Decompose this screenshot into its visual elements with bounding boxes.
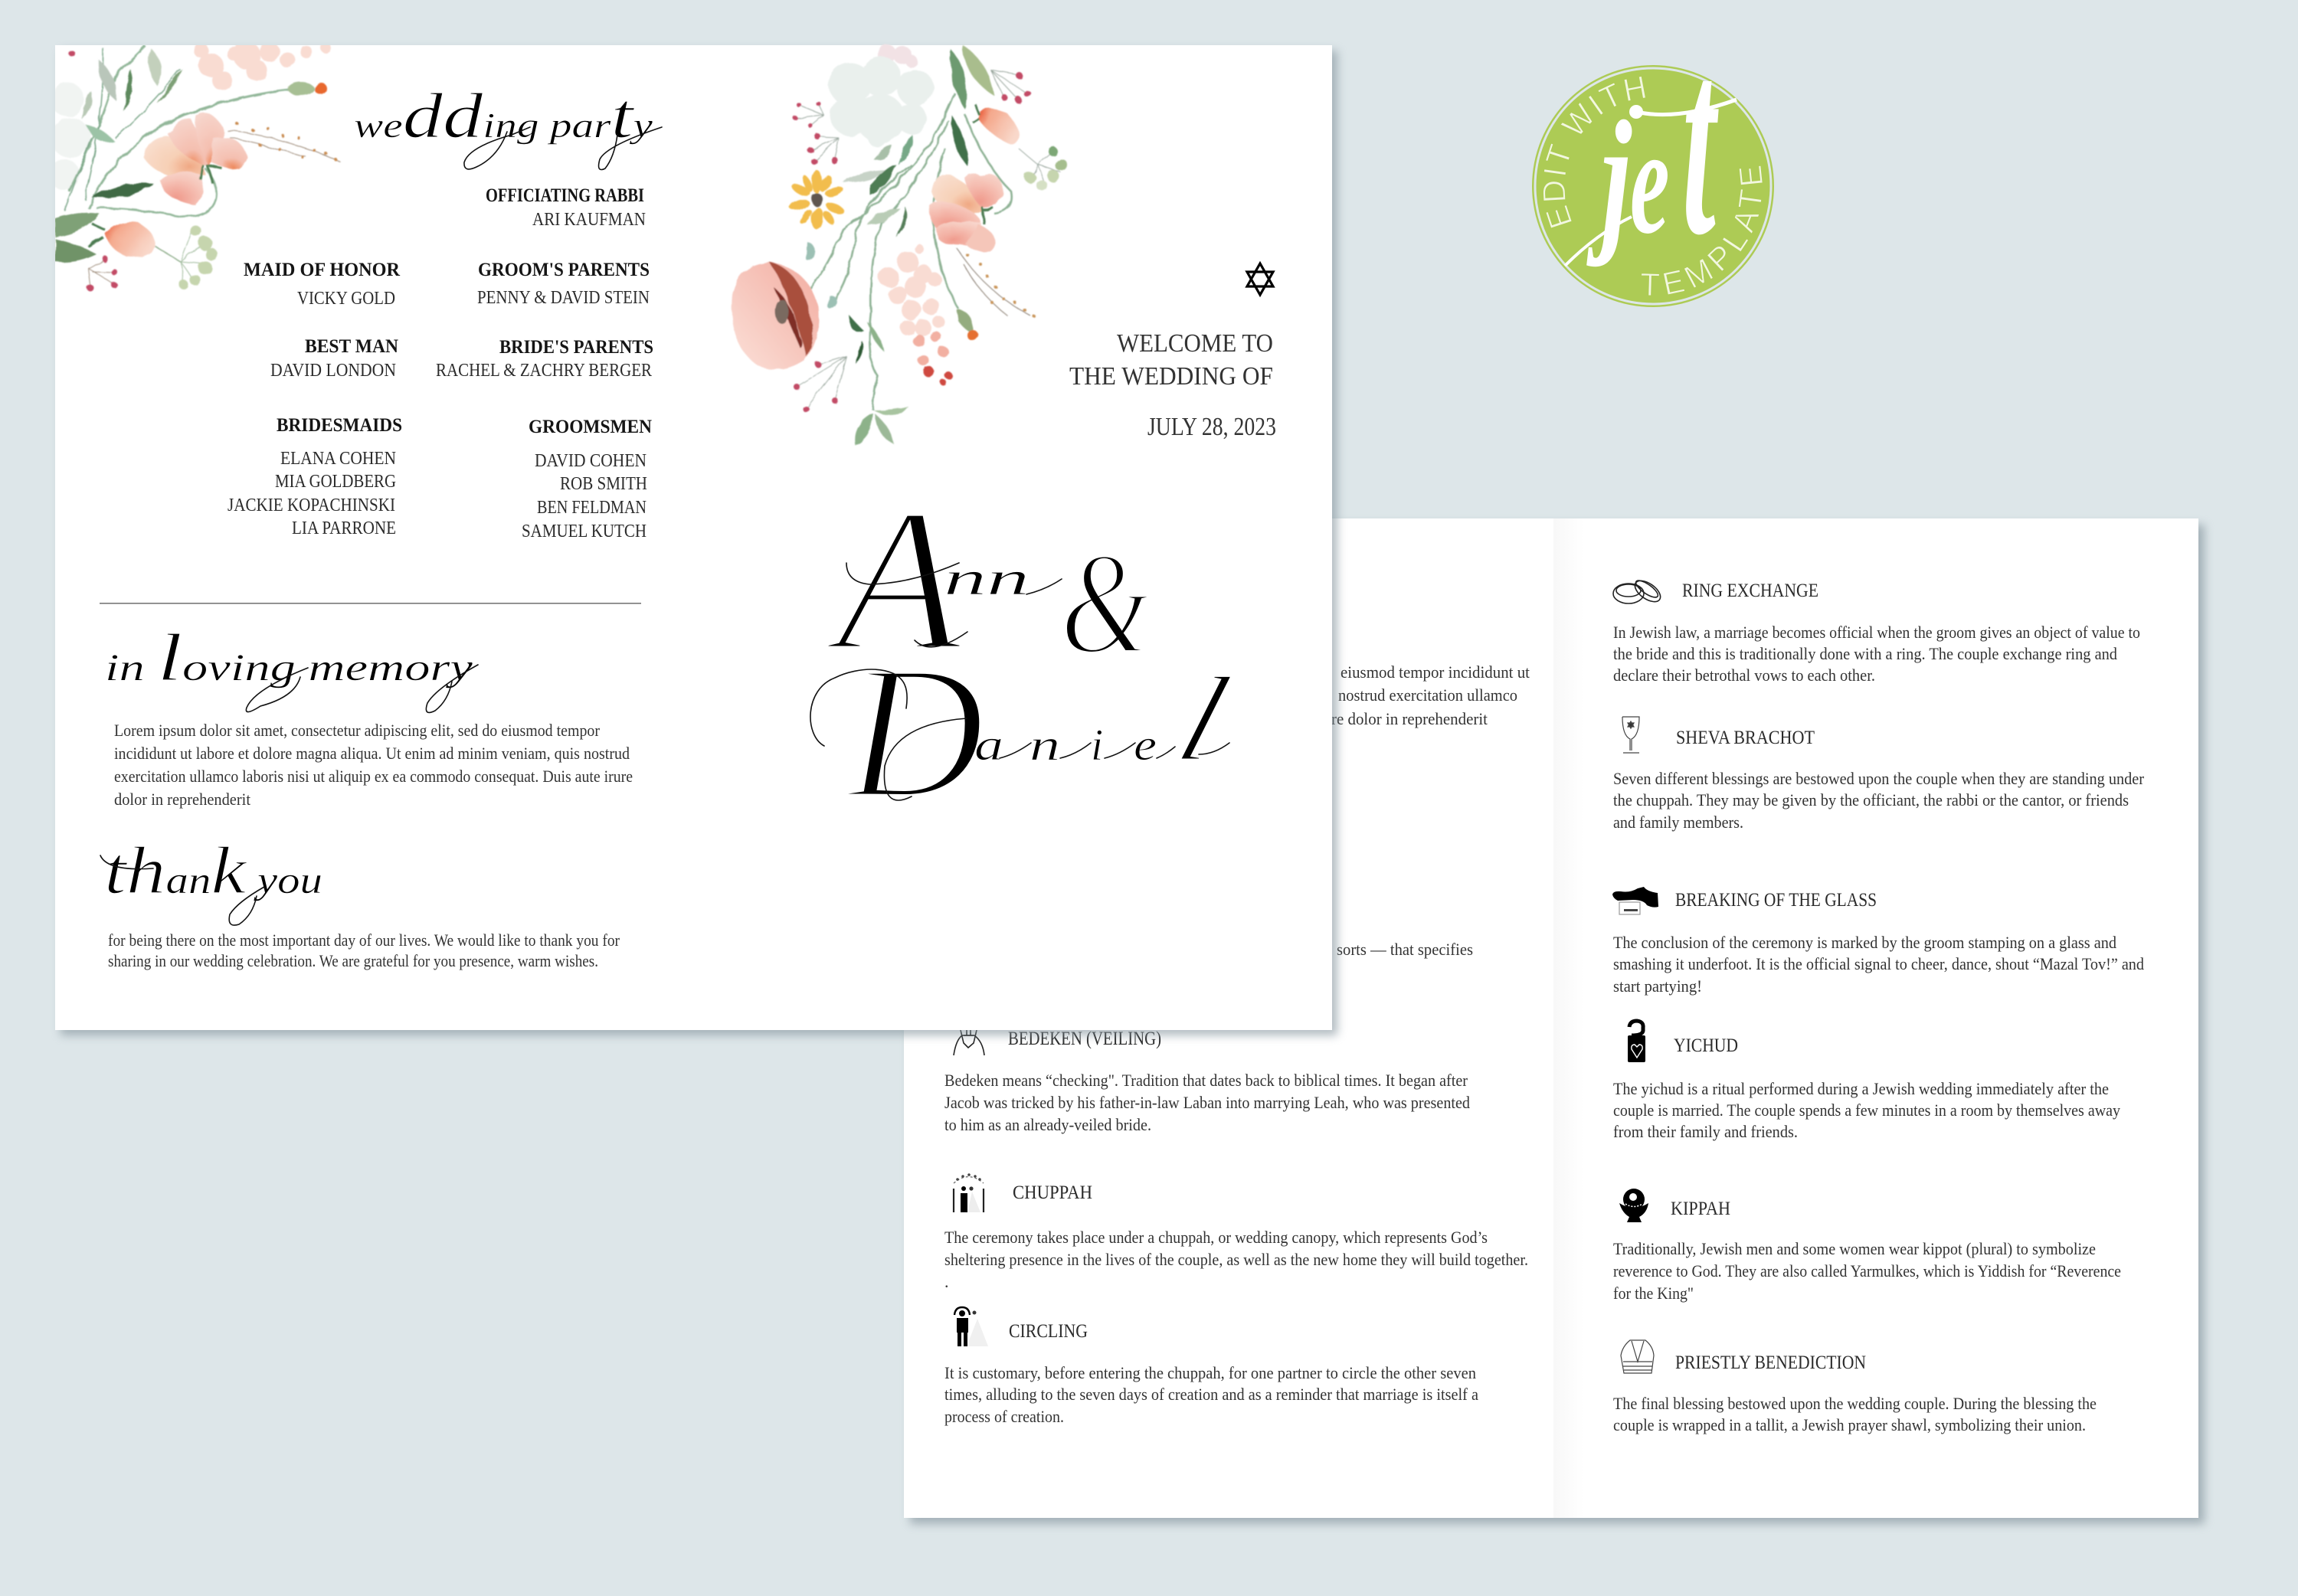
section: circling bbox=[944, 1307, 1478, 1426]
logo wordmark: jet: t bbox=[1682, 0, 1720, 290]
column: best man bbox=[270, 336, 398, 381]
heading: circling: CIRCLING bbox=[1009, 1321, 1088, 1342]
column: maid of honor bbox=[244, 260, 401, 309]
text: in loving memory paragraph: exercitation ullamco laboris nisi ut aliquip ex ea commodo consequat. Duis aute irure bbox=[114, 767, 633, 786]
icon: rings bbox=[1613, 577, 1664, 606]
section: priestly benediction bbox=[1613, 1340, 2097, 1434]
column: officiating rabbi: ARI KAUFMAN bbox=[532, 210, 646, 230]
text: sheva brachot description: the chuppah. They may be given by the officiant, the rabbi or the cantor, or friends bbox=[1613, 790, 2129, 809]
column: bridesmaids: BRIDESMAIDS bbox=[277, 415, 402, 436]
heading: ring exchange: RING EXCHANGE bbox=[1682, 581, 1818, 601]
text: kippah description bbox=[1613, 1239, 2121, 1303]
text: thank you paragraph: sharing in our wedding celebration. We are grateful for you presence, warm wishes. bbox=[108, 951, 598, 970]
column: maid of honor: VICKY GOLD bbox=[297, 289, 395, 309]
text: kippah description: Traditionally, Jewish men and some women wear kippot (plural) to symbolize bbox=[1613, 1239, 2096, 1258]
icon: tallit bbox=[1621, 1340, 1654, 1373]
column: bride's parents: BRIDE'S PARENTS bbox=[499, 337, 653, 358]
column: bridesmaids: LIA PARRONE bbox=[292, 518, 396, 538]
heading: kippah: KIPPAH bbox=[1671, 1199, 1730, 1219]
heading: in loving memory bbox=[105, 621, 478, 712]
column: groomsmen: ROB SMITH bbox=[560, 474, 647, 494]
text: in loving memory paragraph bbox=[114, 721, 633, 809]
text: chuppah description bbox=[944, 1228, 1528, 1291]
column: bridesmaids: ELANA COHEN bbox=[280, 449, 396, 469]
text: circling description bbox=[944, 1363, 1478, 1426]
column: groom's parents bbox=[477, 260, 650, 308]
text: priestly benediction description: The final blessing bestowed upon the wedding couple. During the blessing the bbox=[1613, 1394, 2097, 1413]
text: in loving memory paragraph: Lorem ipsum dolor sit amet, consectetur adipiscing elit, sed do eiusmod tempor bbox=[114, 721, 601, 740]
text: chuppah description: The ceremony takes place under a chuppah, or wedding canopy, which represents God’s bbox=[944, 1228, 1488, 1247]
heading: wedding party: wedd ing par ty bbox=[354, 80, 653, 152]
text: circling description: times, alluding to the seven days of creation and as a reminder that marriage is itself a bbox=[944, 1385, 1478, 1404]
text: ring exchange description: the bride and this is traditionally done with a ring. The couple exchange ring and bbox=[1613, 644, 2117, 663]
icon: kippah bbox=[1619, 1189, 1648, 1222]
text: kippah description: for the King" bbox=[1613, 1284, 1694, 1303]
title: couple names: n bbox=[1030, 720, 1060, 770]
heading: bedeken: BEDEKEN (VEILING) bbox=[1008, 1029, 1161, 1049]
section: bedeken bbox=[944, 1029, 1470, 1134]
heading: chuppah: CHUPPAH bbox=[1013, 1182, 1092, 1203]
column: bride's parents: RACHEL & ZACHRY BERGER bbox=[436, 361, 652, 381]
text: breaking of the glass description bbox=[1613, 933, 2144, 996]
text: welcome to the wedding of bbox=[1069, 329, 1273, 391]
column: groomsmen: GROOMSMEN bbox=[529, 417, 652, 437]
title: couple names: & bbox=[1060, 522, 1152, 685]
heading: breaking of the glass: BREAKING OF THE GLASS bbox=[1675, 890, 1877, 911]
title: couple names: A bbox=[823, 466, 965, 693]
text: ring exchange description bbox=[1613, 623, 2140, 685]
panel: front card bbox=[49, 41, 1337, 1035]
text: yichud description bbox=[1613, 1079, 2120, 1141]
text: yichud description: couple is married. The couple spends a few minutes in a room by themselves away bbox=[1613, 1101, 2120, 1120]
column: best man: BEST MAN bbox=[305, 336, 398, 357]
title: couple names: nn bbox=[944, 553, 1030, 605]
column: bride's parents bbox=[436, 337, 653, 381]
section: kippah bbox=[1613, 1189, 2121, 1303]
title: couple names: e bbox=[1134, 720, 1157, 770]
text: breaking of the glass description: smashing it underfoot. It is the official signal to cheer, dance, shout “Mazal Tov!” and bbox=[1613, 954, 2144, 973]
column: maid of honor: MAID OF HONOR bbox=[244, 260, 401, 280]
title: couple names: a bbox=[974, 720, 1003, 770]
logo text: template: TEMPLATE bbox=[1642, 165, 1763, 296]
column: groomsmen: SAMUEL KUTCH bbox=[522, 522, 647, 541]
section: yichud bbox=[1613, 1021, 2120, 1141]
column: groom's parents: GROOM'S PARENTS bbox=[478, 260, 650, 280]
text: sheva brachot description: and family members. bbox=[1613, 813, 1743, 832]
title: couple names: i bbox=[1091, 720, 1103, 770]
text: date: JULY 28, 2023 bbox=[1147, 413, 1276, 441]
section: breaking of the glass bbox=[1612, 887, 2144, 996]
logo text: edit with: EDIT WITH bbox=[1543, 77, 1645, 228]
heading: yichud: YICHUD bbox=[1674, 1035, 1738, 1056]
column: groomsmen: DAVID COHEN bbox=[535, 451, 647, 471]
text: circling description: process of creation. bbox=[944, 1407, 1064, 1426]
text: priestly benediction description bbox=[1613, 1394, 2097, 1434]
heading: sheva brachot: SHEVA BRACHOT bbox=[1676, 728, 1815, 748]
text: in loving memory paragraph: incididunt ut labore et dolore magna aliqua. Ut enim ad minim veniam, quis nostrud bbox=[114, 744, 630, 763]
column: bridesmaids bbox=[228, 415, 402, 538]
text: sheva brachot description: Seven different blessings are bestowed upon the couple when they are standing under bbox=[1613, 769, 2145, 788]
icon: door hanger bbox=[1628, 1021, 1645, 1062]
text: bedeken description bbox=[944, 1071, 1470, 1134]
text: priestly benediction description: couple is wrapped in a tallit, a Jewish prayer shawl, symbolizing their union. bbox=[1613, 1415, 2086, 1434]
logo wordmark: jet bbox=[1565, 0, 1737, 290]
column: groomsmen bbox=[522, 417, 652, 541]
text: yichud description: from their family and friends. bbox=[1613, 1122, 1798, 1141]
column: bridesmaids: JACKIE KOPACHINSKI bbox=[228, 495, 395, 515]
text: circling description: It is customary, before entering the chuppah, for one partner to circle the other seven bbox=[944, 1363, 1476, 1382]
icon: wine glass bbox=[1622, 717, 1639, 753]
heading: priestly benediction: PRIESTLY BENEDICTION bbox=[1675, 1352, 1866, 1373]
column: officiating rabbi: OFFICIATING RABBI bbox=[486, 185, 644, 206]
section: chuppah bbox=[944, 1173, 1528, 1291]
text: bedeken description: Jacob was tricked by his father-in-law Laban into marrying Leah, who was presented bbox=[944, 1093, 1470, 1112]
text: in loving memory paragraph: dolor in reprehenderit bbox=[114, 790, 250, 809]
text: yichud description: The yichud is a ritual performed during a Jewish wedding immediately after the bbox=[1613, 1079, 2109, 1098]
text: welcome to the wedding of: THE WEDDING OF bbox=[1069, 362, 1273, 391]
logo: edit with jet template bbox=[1532, 0, 1774, 307]
text: kippah description: reverence to God. They are also called Yarmulkes, which is Yiddish for “Reverence bbox=[1613, 1261, 2121, 1280]
column: best man: DAVID LONDON bbox=[270, 361, 396, 381]
text: partially hidden lorem paragraph bbox=[1331, 662, 1530, 728]
text: thank you paragraph bbox=[108, 930, 620, 970]
text: chuppah description: . bbox=[944, 1272, 948, 1291]
column: groomsmen: BEN FELDMAN bbox=[537, 498, 647, 518]
text: bedeken description: to him as an already-veiled bride. bbox=[944, 1115, 1151, 1134]
icon: bride and groom bbox=[954, 1307, 988, 1346]
title: couple names bbox=[810, 466, 1242, 839]
heading: thank you: thank you bbox=[104, 834, 322, 908]
title: couple names: l bbox=[1165, 653, 1242, 787]
text: partially hidden lorem paragraph: eiusmod tempor incididunt ut bbox=[1340, 662, 1530, 682]
icon: veil bbox=[954, 1030, 984, 1055]
text: ring exchange description: In Jewish law, a marriage becomes official when the groom gives an object of value to bbox=[1613, 623, 2140, 642]
icon: chuppah canopy bbox=[954, 1173, 984, 1212]
text: chuppah description: sheltering presence in the lives of the couple, as well as the new home they will build together. bbox=[944, 1250, 1528, 1269]
text: partially hidden specifies line: sorts — that specifies bbox=[1337, 940, 1473, 959]
heading: in loving memory: in loving memory bbox=[105, 621, 473, 695]
icon: star of david bbox=[1247, 263, 1273, 295]
text: welcome to the wedding of: WELCOME TO bbox=[1117, 329, 1273, 358]
section: sheva brachot bbox=[1613, 717, 2145, 832]
text: sheva brachot description bbox=[1613, 769, 2145, 832]
illustration: hanging watercolor bouquet bbox=[732, 44, 1067, 446]
column: groom's parents: PENNY & DAVID STEIN bbox=[477, 288, 650, 308]
icon: shoe on glass bbox=[1612, 887, 1658, 914]
text: partially hidden lorem paragraph: re dolor in reprehenderit bbox=[1331, 709, 1488, 728]
text: breaking of the glass description: The conclusion of the ceremony is marked by the groom stamping on a glass and bbox=[1613, 933, 2116, 952]
section: ring exchange bbox=[1613, 577, 2140, 685]
logo wordmark: jet: j bbox=[1586, 88, 1632, 268]
text: thank you paragraph: for being there on the most important day of our lives. We would like to thank you for bbox=[108, 930, 620, 950]
illustration: corner watercolor bouquet bbox=[49, 41, 340, 291]
column: officiating rabbi bbox=[486, 185, 646, 230]
text: bedeken description: Bedeken means “checking". Tradition that dates back to biblical times. It began after bbox=[944, 1071, 1468, 1090]
text: breaking of the glass description: start partying! bbox=[1613, 976, 1702, 996]
logo wordmark: jet: e bbox=[1630, 96, 1669, 266]
panel: back card ceremony guide bbox=[904, 518, 2205, 1524]
logo disc bbox=[1532, 65, 1774, 307]
text: ring exchange description: declare their betrothal vows to each other. bbox=[1613, 666, 1875, 685]
text: partially hidden lorem paragraph: nostrud exercitation ullamco bbox=[1338, 685, 1517, 705]
title: couple names: D bbox=[844, 626, 985, 839]
column: bridesmaids: MIA GOLDBERG bbox=[275, 472, 396, 492]
